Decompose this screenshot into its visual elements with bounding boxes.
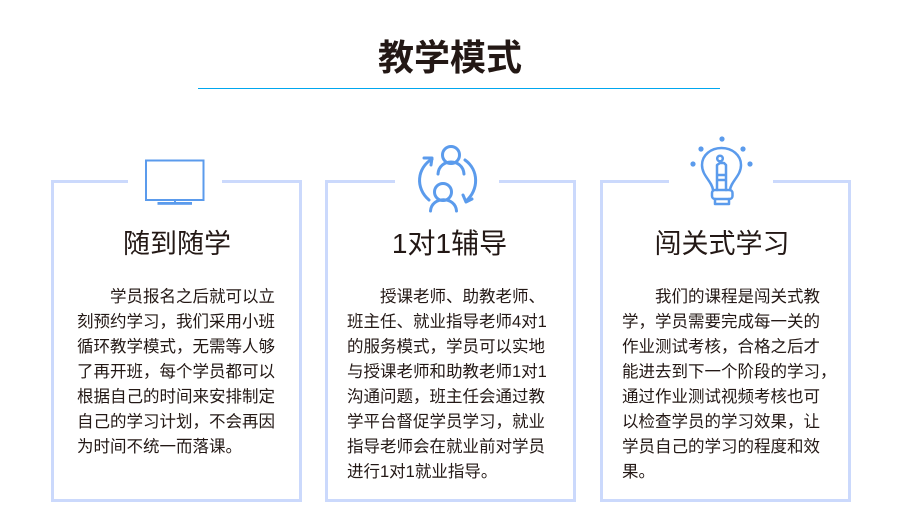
text block: 刻预约学习，我们采用小班 xyxy=(77,313,275,331)
text block: 为时间不统一而落课。 xyxy=(77,438,242,456)
heading: 随到随学 xyxy=(123,229,231,259)
text block xyxy=(622,288,836,481)
panel: 闯关式学习 xyxy=(600,136,851,502)
text block: 进行1对1就业指导。 xyxy=(347,463,497,481)
text block: 与授课老师和助教老师1对1 xyxy=(347,363,547,381)
panel: 1对1辅导 xyxy=(325,145,576,502)
text block: 通过作业测试视频考核也可 xyxy=(622,388,820,406)
title: 教学模式 xyxy=(378,37,522,78)
text block: 作业测试考核，合格之后才 xyxy=(622,338,820,356)
icon: light bulb xyxy=(690,136,753,206)
text block: 授课老师、助教老师、 xyxy=(380,288,545,306)
icon: two people with cycle arrows xyxy=(418,145,478,212)
text block: 指导老师会在就业前对学员 xyxy=(347,438,545,456)
text block: 我们的课程是闯关式教 xyxy=(655,288,820,306)
icon: monitor xyxy=(145,160,204,205)
panel border xyxy=(325,180,576,502)
text block xyxy=(347,288,547,481)
text block: 班主任、就业指导老师4对1 xyxy=(347,313,547,331)
text block: 学员报名之后就可以立 xyxy=(110,288,275,306)
text block xyxy=(77,288,275,456)
text block: 沟通问题，班主任会通过教 xyxy=(347,388,545,406)
text block: 了再开班，每个学员都可以 xyxy=(77,363,275,381)
text block: 循环教学模式，无需等人够 xyxy=(77,338,275,356)
panel border xyxy=(600,180,851,502)
text block: 根据自己的时间来安排制定 xyxy=(77,388,275,406)
text block: 果。 xyxy=(622,463,655,481)
text block: 以检查学员的学习效果，让 xyxy=(622,413,820,431)
text block: 学员自己的学习的程度和效 xyxy=(622,438,820,456)
title underline xyxy=(198,88,720,89)
text block: 自己的学习计划，不会再因 xyxy=(77,413,275,431)
text block: 学，学员需要完成每一关的 xyxy=(622,313,820,331)
heading: 闯关式学习 xyxy=(654,229,790,259)
panel border xyxy=(51,180,302,502)
text block: 的服务模式，学员可以实地 xyxy=(347,338,545,356)
panel: 随到随学 xyxy=(51,160,302,502)
heading: 1对1辅导 xyxy=(392,228,507,259)
text block: 能进去到下一个阶段的学习， xyxy=(622,363,836,381)
text block: 学平台督促学员学习，就业 xyxy=(347,413,545,431)
